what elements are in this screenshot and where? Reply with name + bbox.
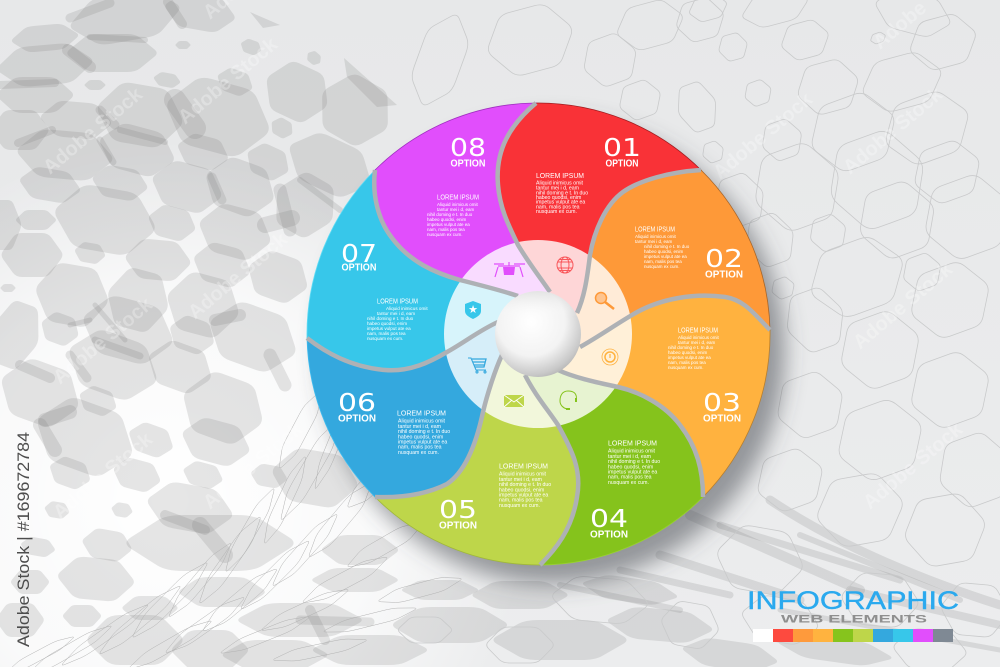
panel: segment 05 lime: nusquam ex cum. <box>499 503 540 509</box>
panel: segment 04 green: nusquam ex cum. <box>608 480 649 486</box>
panel: segment 06 blue: OPTION <box>338 414 376 424</box>
panel: segment 01 red: OPTION <box>606 158 638 170</box>
panel: segment 05 lime: Aliquid inimicus omit <box>499 472 547 478</box>
watermarks: Adobe Stock <box>174 33 283 129</box>
panel: segment 02 orange: LOREM IPSUM <box>635 226 675 234</box>
logo title: INFOGRAPHIC <box>747 587 959 615</box>
panel: segment 05 lime: impetus vulput ate ea <box>499 492 548 498</box>
panel: segment 04 green: nihil doming e t. In duo <box>608 459 660 465</box>
watermarks: Adobe Stock <box>849 258 958 354</box>
panel: segment 01 red: Aliquid inimicus omit <box>536 180 584 186</box>
icon: shield with star: ★ <box>468 304 478 316</box>
icon: headset <box>560 391 576 409</box>
panel: segment 05 lime: nihil doming e t. In duo <box>499 482 551 488</box>
panel: segment 02 orange <box>538 170 770 347</box>
panel: segment 03 yellow: nusquam ex cum. <box>668 365 704 370</box>
icon: shield with star <box>465 301 481 319</box>
panel: segment 04 green: Aliquid inimicus omit <box>608 448 656 454</box>
panel: segment 04 green: impetus vulput ate ea <box>608 470 657 476</box>
panel: segment 06 blue: 06 <box>338 388 376 417</box>
logo subtitle: WEB ELEMENTS <box>781 614 927 626</box>
infographic wheel <box>307 103 770 565</box>
panel: segment 03 yellow: impetus vulput ate ea <box>668 355 711 360</box>
panel: segment 08 purple: tantur mei i d, eam <box>437 207 475 212</box>
watermarks: Adobe Stock <box>859 418 968 514</box>
icon: envelope <box>504 395 524 407</box>
panel: segment 02 orange: 02 <box>705 244 743 273</box>
panel: segment 02 orange: nusquam ex cum. <box>644 264 680 269</box>
watermarks: Adobe Stock <box>709 88 818 184</box>
watermarks: Adobe Stock <box>839 83 948 179</box>
panel: segment 02 orange: impetus vulput ate ea <box>644 254 687 259</box>
panel: segment 07 cyan <box>307 170 538 370</box>
panel: segment 08 purple: OPTION <box>450 158 486 170</box>
watermarks: Adobe Stock <box>199 418 308 514</box>
outline hexagons <box>398 0 1000 667</box>
panel: segment 01 red <box>498 103 701 334</box>
panel: segment 04 green: tantur mei i d, eam <box>608 454 651 460</box>
panel: segment 07 cyan: nusquam ex cum. <box>367 336 403 341</box>
panel: segment 02 orange: nihil doming e t. In duo <box>644 244 690 249</box>
panel: segment 01 red: tantur mei i d, eam <box>536 186 579 192</box>
logo block <box>747 587 959 642</box>
panel: segment 01 red: nusquam ex cum. <box>536 209 577 215</box>
panel: segment 02 orange: nam, malis pos tea <box>644 259 682 264</box>
icon: shopping cart <box>468 358 486 373</box>
panel: segment 01 red: habeo quodsi, enim <box>536 195 581 201</box>
panel: segment 06 blue: tantur mei i d, eam <box>398 424 441 430</box>
icon: globe <box>557 257 573 273</box>
panel: segment 07 cyan: Aliquid inimicus omit <box>386 306 428 311</box>
panel: segment 05 lime: 05 <box>439 495 477 524</box>
panel: segment 03 yellow: nam, malis pos tea <box>668 360 706 365</box>
inner pale disc <box>444 240 632 428</box>
panel: segment 08 purple: habeo quodsi, enim <box>427 217 467 222</box>
panel: segment 05 lime: OPTION <box>439 520 477 532</box>
panel: segment 08 purple: Aliquid inimicus omit <box>437 202 479 207</box>
panel: segment 01 red: nihil doming e t. In duo <box>536 190 588 196</box>
icon: drone <box>494 262 525 277</box>
panel: segment 02 orange: OPTION <box>705 270 743 280</box>
panel: segment 03 yellow: nihil doming e t. In duo <box>668 345 714 350</box>
icon: magnifier <box>596 292 614 309</box>
panel: segment 06 blue: nihil doming e t. In duo <box>398 429 450 435</box>
panel: segment 07 cyan: LOREM IPSUM <box>377 298 418 306</box>
panel: segment 01 red: 01 <box>603 133 641 162</box>
panel: segment 05 lime: nam, malis pos tea <box>499 498 543 504</box>
panel: segment 02 orange: habeo quodsi, enim <box>644 249 684 254</box>
watermarks: Adobe Stock <box>184 228 293 324</box>
watermarks <box>39 0 968 524</box>
watermarks: Adobe Stock <box>39 83 148 179</box>
panel: segment 06 blue: nam, malis pos tea <box>398 444 442 450</box>
panel: segment 08 purple: impetus vulput ate ea <box>427 222 470 227</box>
panel: segment 01 red: LOREM IPSUM <box>536 173 584 180</box>
panel: segment 04 green: OPTION <box>590 530 628 540</box>
wheel drop shadow <box>321 120 785 584</box>
icon: clock <box>602 349 618 365</box>
panel: segment 07 cyan: OPTION <box>342 262 376 274</box>
scribble lines, lower left <box>4 372 463 667</box>
panel: segment 08 purple: 08 <box>450 133 486 162</box>
panel: segment 03 yellow: habeo quodsi, enim <box>668 350 708 355</box>
panel: segment 06 blue: impetus vulput ate ea <box>398 440 447 446</box>
panel: segment 04 green: habeo quodsi, enim <box>608 464 653 470</box>
panel: segment 05 lime: habeo quodsi, enim <box>499 488 544 494</box>
colour strip <box>753 629 953 642</box>
panel: segment 03 yellow: 03 <box>703 388 741 417</box>
panel: segment 03 yellow: OPTION <box>703 414 741 424</box>
panel: segment 06 blue: habeo quodsi, enim <box>398 434 443 440</box>
panel: segment 04 green <box>525 334 703 565</box>
panel: segment 07 cyan: tantur mei i d, eam <box>377 311 415 316</box>
panel: segment 01 red: nam, malis pos tea <box>536 204 580 210</box>
panel: segment 07 cyan: nam, malis pos tea <box>367 331 406 336</box>
watermarks: Adobe Stock <box>49 293 158 389</box>
panel: segment 06 blue <box>307 322 538 497</box>
panel: segment 07 cyan: impetus vulput ate ea <box>367 326 411 331</box>
panel: segment 04 green: 04 <box>590 504 628 533</box>
panel: segment 04 green: LOREM IPSUM <box>608 440 657 448</box>
segment dividers <box>307 103 770 565</box>
panel: segment 08 purple: nam, malis pos tea <box>427 227 465 232</box>
watermarks: Adobe Stock <box>49 428 158 524</box>
panel: segment 05 lime: LOREM IPSUM <box>499 464 548 470</box>
panel: segment 03 yellow: tantur mei i d, eam <box>678 340 716 345</box>
panel: segment 02 orange: tantur mei i d, eam <box>635 239 673 244</box>
panel: segment 03 yellow: Aliquid inimicus omit <box>678 335 720 340</box>
panel: segment 07 cyan: habeo quodsi, enim <box>367 321 407 326</box>
panel: segment 03 yellow: LOREM IPSUM <box>678 328 718 334</box>
panel: segment 07 cyan: nihil doming e t. In duo <box>367 316 414 321</box>
panel: segment 04 green: nam, malis pos tea <box>608 474 652 480</box>
side credit: Adobe Stock | #169672784 <box>14 432 33 647</box>
panel: segment 06 blue: Aliquid inimicus omit <box>398 418 446 424</box>
panel: segment 08 purple <box>374 103 550 334</box>
panel: segment 07 cyan: 07 <box>341 239 377 268</box>
panel: segment 05 lime <box>375 334 578 565</box>
panel: segment 06 blue: LOREM IPSUM <box>397 410 446 418</box>
panel: segment 03 yellow <box>538 296 770 497</box>
panel: segment 08 purple: LOREM IPSUM <box>437 194 479 202</box>
panel: segment 06 blue: nusquam ex cum. <box>398 450 439 456</box>
center sphere <box>495 291 581 377</box>
panel: segment 05 lime: tantur mei i d, eam <box>499 477 542 483</box>
panel: segment 01 red: impetus vulput ate ea <box>536 200 585 206</box>
panel: segment 08 purple: nihil doming e t. In duo <box>427 212 473 217</box>
panel: segment 02 orange: Aliquid inimicus omit <box>635 234 677 239</box>
panel: segment 08 purple: nusquam ex cum. <box>427 232 463 237</box>
